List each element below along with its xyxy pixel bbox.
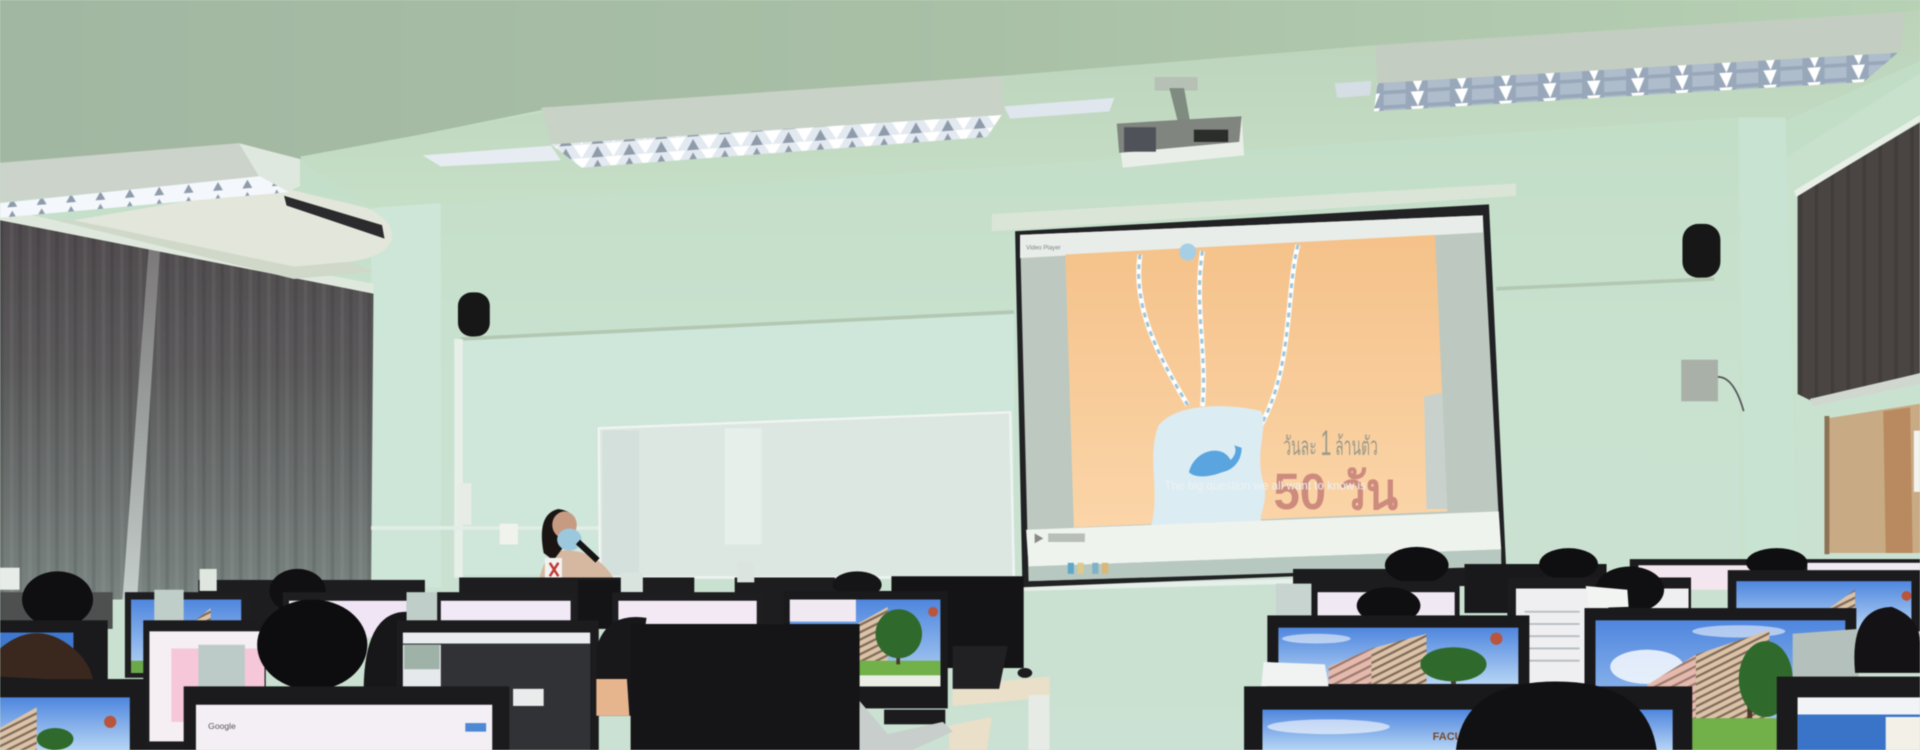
projection screen casing [992,184,1516,231]
front right browser monitor [1777,677,1920,750]
student head right back three [1746,548,1807,577]
hair [542,509,576,560]
left wall speaker [458,292,490,336]
orange video frame [1065,235,1447,527]
face [552,511,577,538]
video player title bar [1020,215,1483,258]
side wall panels [371,73,1920,587]
third row pink document monitor [143,620,266,750]
student head behind monitor [269,569,326,613]
student long hair [364,612,407,688]
desktop taskbar [1029,549,1501,581]
right back row monitors [1276,559,1920,615]
video caption: fifty days: 50 วัน [1273,463,1398,520]
left window curtain [0,208,373,600]
video caption: one million per day: วันละ 1 ล้านตัว [1283,423,1378,463]
second row monitor white screen centre [437,592,576,636]
front left monitor campus wallpaper [0,679,147,750]
third row campus monitor [1261,615,1529,689]
third row large campus monitor [1584,608,1859,750]
water streams [1139,243,1298,425]
video player title bar: Video Player [1026,245,1061,252]
name card with x [545,558,562,580]
student head rear centre [833,571,882,598]
grey sign [1793,629,1859,680]
monitor with campus wallpaper near aisle [784,591,948,708]
right ceiling light [1335,12,1905,111]
white container with water [1151,406,1265,526]
ceiling projector [1117,77,1244,168]
wall electrical box [1681,360,1744,411]
second row monitor white screen [283,592,437,637]
second row monitor white screen right [612,592,763,630]
air conditioner [55,186,392,279]
ceiling [0,0,1920,184]
student brown hair [0,633,93,681]
student head right back two [1539,548,1598,580]
right second row campus monitor [1728,570,1920,631]
right second row white monitor [1311,581,1460,618]
front campus monitor with student head [1244,681,1692,750]
right window curtain [1794,115,1920,406]
student head front [1456,681,1657,750]
ledge under the screen [1022,579,1298,591]
monitor wallpaper text: FACULTY [1433,731,1483,743]
centre ceiling light [422,76,1114,168]
student hair orange tips [596,617,647,716]
student arm and keyboard [860,701,953,750]
student head mid right [1357,587,1420,624]
student head back left [22,571,93,628]
student head right back one [1385,547,1449,584]
player control bar [1026,511,1501,566]
video subtitle: The big question we all want to know is [1164,479,1366,492]
wall rail and conduit [371,279,1714,577]
microphone [578,542,598,560]
right wall speaker [1682,224,1720,278]
whale [1189,445,1242,476]
whiteboard [599,412,1014,577]
browser search text: Google [208,721,236,731]
paper sign [1261,662,1329,686]
light grey shape in video [1424,393,1447,509]
face mask [557,529,582,551]
back row monitors left [0,563,835,629]
student head far right [1854,607,1920,673]
left ceiling light [0,143,300,218]
presenter [539,509,616,582]
body [539,550,616,582]
right second row document monitor [1507,577,1691,688]
rear of black monitor [631,624,860,750]
third row left monitor [0,620,108,681]
lowered ceiling soffit [300,11,1920,210]
front browser monitor [184,686,509,750]
projection screen [1015,204,1506,587]
desk with laptop and mouse [949,646,1049,750]
student head with paper [1586,566,1664,613]
wooden door [1824,404,1920,554]
second row monitor with campus wallpaper [125,590,250,678]
large rear black monitor [891,576,1024,668]
student head dark front [257,600,367,690]
third row dark editor monitor [397,620,599,750]
